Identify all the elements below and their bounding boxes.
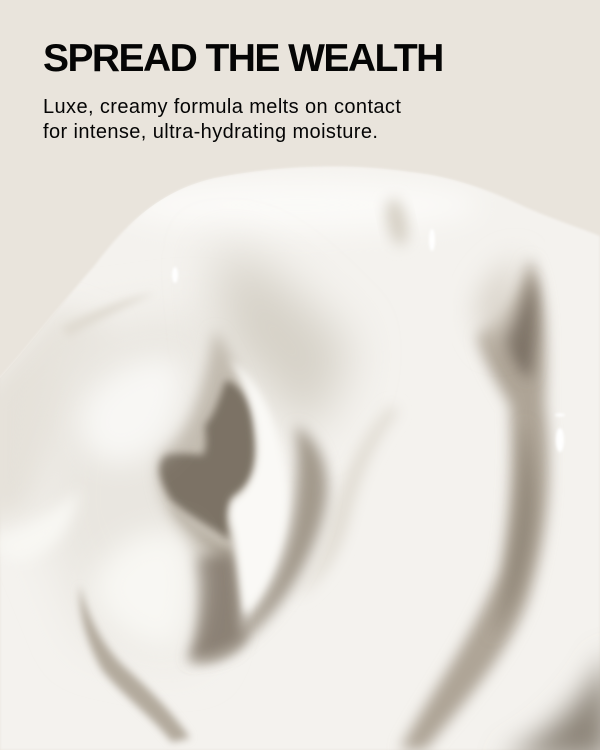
- bottom right corner shadow: [500, 650, 600, 750]
- lighter band under hollow: [181, 520, 226, 553]
- right flank of swirl: [190, 425, 328, 661]
- cream body: [0, 166, 600, 750]
- left lower streak: [80, 585, 190, 742]
- left fold highlight: [26, 501, 74, 548]
- description text: Luxe, creamy formula melts on contact: [43, 96, 401, 118]
- central dark hollow: [160, 380, 255, 540]
- wide halo around hollow: [157, 330, 258, 660]
- lower dark shadow: [188, 553, 245, 660]
- upper-left lobe: [80, 357, 184, 463]
- left mid tone: [54, 322, 202, 590]
- swoosh dark core: [503, 275, 535, 380]
- swoosh mid core: [496, 439, 540, 622]
- title: SPREAD THE WEALTH: [43, 37, 443, 80]
- description text: [43, 96, 401, 143]
- dark thin crease upper left: [67, 296, 142, 332]
- right brown swoosh: [400, 258, 549, 750]
- white ridge in swirl: [229, 360, 287, 615]
- soft shadow above ridge: [215, 250, 350, 435]
- bright upper highlight: [142, 183, 420, 217]
- description text: for intense, ultra-hydrating moisture.: [43, 121, 378, 143]
- glints: [172, 229, 565, 452]
- translucent left edge: [0, 314, 80, 523]
- illustration: cream swirl: [0, 166, 600, 750]
- diagonal centre crease: [306, 408, 397, 588]
- soft wide shade beside swoosh: [478, 255, 520, 350]
- lower-left lobe: [90, 530, 195, 650]
- top right dimple: [382, 196, 412, 248]
